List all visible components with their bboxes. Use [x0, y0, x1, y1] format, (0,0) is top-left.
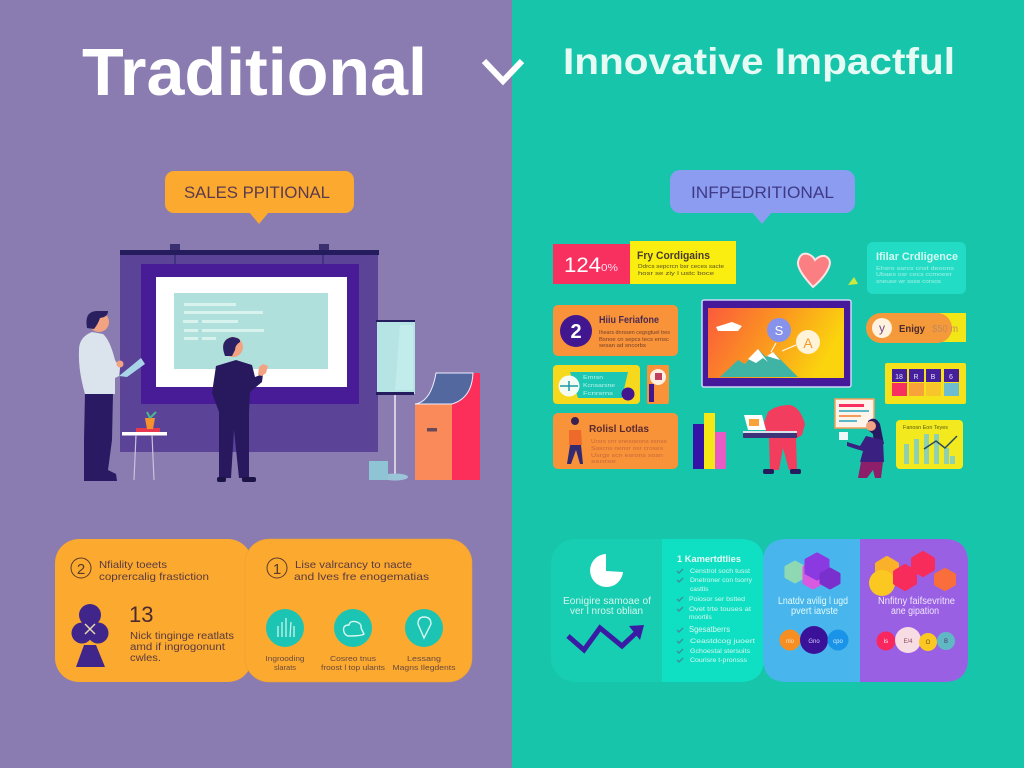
- illustration: central screen: A: [803, 335, 813, 351]
- checklist: Censtrol soch tusst: [690, 568, 750, 575]
- caption: Lnatdv avilig l ugd: [778, 596, 848, 607]
- bubbles: is: [884, 639, 888, 645]
- bubbles: Gno: [808, 639, 820, 645]
- panel: orange card 2: Ihears dnrssen cegsgtuel tres: [599, 330, 671, 336]
- panel: teal card: Ubaes osr cecs ccmoeer: [876, 272, 952, 278]
- hexagon cluster: [869, 553, 954, 596]
- checklist: [677, 554, 755, 664]
- number badge 1: [267, 558, 287, 578]
- bar chart: [693, 413, 726, 469]
- checklist: Sgesatberrs: [689, 625, 730, 634]
- panel: yellow info card: [553, 365, 640, 404]
- panel: orange card with figure: [553, 413, 678, 469]
- panel: orange card 2: 2: [570, 321, 582, 343]
- panel: bottom left second card: slarats: [274, 663, 296, 672]
- heading text: Lise valrcancy to nacte: [295, 559, 412, 571]
- bubbles: O: [926, 640, 931, 646]
- bubbles: B: [944, 639, 948, 645]
- panel: bottom left orange card: [55, 539, 252, 682]
- person at laptop: [743, 405, 805, 474]
- panel: bottom left second card: [245, 539, 472, 682]
- panel: bottom left orange card: coprercalig frastiction: [99, 571, 209, 583]
- panel: energy pill: Enigy: [899, 323, 925, 335]
- panel: orange card 2: sesan ad sncorbs: [599, 343, 647, 349]
- panel: teal card: Ifilar Crdligence: [876, 251, 958, 263]
- label: inpedritional pill: INFPEDRITIONAL: [691, 183, 834, 202]
- panel: stat card 124%: 0%: [601, 263, 618, 274]
- panel: bottom left second card: Magns Ilegdents: [392, 663, 456, 672]
- panel: energy pill: y: [879, 321, 885, 335]
- caption: Nnfitny faifsevritne: [878, 596, 955, 607]
- caption 2: Cosreo tnus: [330, 654, 376, 663]
- caption 3: Lessang: [407, 654, 441, 663]
- hexagon cluster: [786, 554, 839, 588]
- panel: bottom left second card: and lves fre enogematias: [294, 571, 429, 583]
- panel: energy pill: $50 m: [932, 324, 958, 335]
- panel: teal card: sneuse wr ssse corsos: [876, 279, 942, 285]
- panel: orange card 2: Bsnoe cn sepcs tecs ernsc: [599, 337, 670, 343]
- icon: chevron: [484, 61, 522, 81]
- checklist: Dnetroner con tsorry: [690, 577, 753, 584]
- icon: person with cross: [72, 604, 108, 667]
- icon: pointer triangle: [848, 277, 858, 285]
- panel: stat card 124%: 124: [564, 254, 601, 277]
- panel: orange card 2: [553, 305, 678, 356]
- panel: yellow grid card: 6: [949, 374, 953, 381]
- projection backdrop: [120, 244, 379, 452]
- checklist: Poiosor ser bstted: [689, 596, 745, 603]
- panel: presentation scene: [79, 244, 480, 482]
- panel: purple card: ane gipation: [891, 606, 939, 617]
- person with clipboard: [79, 311, 145, 481]
- panel: stat card 124%: [553, 241, 736, 284]
- panel: stat card 124%: hosr se ziy l ustc boce: [638, 271, 714, 277]
- panel: yellow info card: Ernrsn: [583, 375, 603, 381]
- panel: blue card: [763, 539, 860, 682]
- number badge 2: 2: [77, 561, 85, 578]
- number badge 2: [71, 558, 91, 578]
- panel: orange card with figure: ssorse: [591, 459, 616, 465]
- label: sales pill: SALES PPITIONAL: [184, 183, 330, 202]
- flip chart: [369, 320, 415, 480]
- panel: stat card 124%: Ddrcs sepcrcn bsr ceces sacte: [638, 264, 724, 270]
- checklist: casttis: [690, 586, 709, 593]
- label: inpedritional pill: [670, 170, 855, 224]
- panel: line and bar chart card: Fanosn Eon Teyes: [903, 425, 949, 431]
- illustration: central screen: [702, 300, 851, 387]
- right background: [512, 0, 1024, 768]
- panel: orange card with figure: Sascns oensr osr croses: [591, 446, 664, 452]
- checklist: Gchoestal stersuits: [690, 648, 751, 655]
- panel: yellow grid card: R: [913, 374, 919, 381]
- panel: orange card with figure: Rolisl Lotlas: [589, 423, 649, 435]
- panel: teal card: [867, 242, 966, 294]
- panel: purple card: [860, 539, 968, 682]
- panel: yellow info card: Kcnsarsne: [583, 383, 615, 389]
- left background: [0, 0, 512, 768]
- title: Innovative Impactful: Innovative Impactful: [563, 41, 955, 82]
- icon: bulb: [405, 609, 443, 647]
- checklist: Ovet trte touses at: [689, 606, 751, 613]
- panel: yellow grid card: [885, 363, 966, 404]
- heading text: Nfiality toeets: [99, 559, 167, 571]
- panel: line and bar chart card: [896, 420, 963, 469]
- title: Traditional: Traditional: [82, 35, 427, 110]
- panel: bottom right teal card: [551, 539, 764, 682]
- icon: cloud: [334, 609, 372, 647]
- panel: bottom left second card: froost l top ulants: [321, 663, 385, 672]
- panel: orange card 2: Hiiu Feriafone: [599, 315, 659, 326]
- stat 13: 13: [129, 602, 153, 627]
- bubbles: [780, 626, 848, 654]
- panel: yellow info card: Fcnrsrns: [583, 391, 614, 397]
- icon: hand: [266, 609, 304, 647]
- label: sales pill: [165, 171, 354, 224]
- caption: Eonigire samoae of: [563, 596, 651, 607]
- caption 1: Ingrooding: [266, 654, 304, 663]
- side table with plant: [122, 412, 167, 480]
- checklist: 1 Kamertdtlies: [677, 554, 741, 565]
- panel: energy pill: [866, 313, 966, 343]
- panel: bottom left orange card: amd if ingrogonunt: [130, 642, 225, 653]
- checklist: Courisre t-pronsss: [690, 657, 748, 664]
- person with chart board: [835, 399, 884, 478]
- panel: blue card: pvert iavste: [791, 606, 838, 617]
- bubbles: [876, 627, 955, 653]
- icon: zigzag arrow: [568, 625, 644, 650]
- panel: yellow grid card: B: [931, 374, 936, 381]
- panel: bottom left orange card: cwles.: [130, 653, 161, 664]
- panel: orange card with figure: Usrgs scn esrons sosn: [591, 453, 663, 459]
- number badge 1: 1: [273, 561, 281, 578]
- stat description: Nick tinginge reatlats: [130, 631, 234, 642]
- panel: yellow grid card: 18: [895, 374, 903, 381]
- checklist: Ceastdcog juoert: [690, 638, 755, 645]
- icon: heart: [798, 254, 830, 287]
- person at screen: [212, 337, 268, 482]
- panel: small orange tag: [647, 365, 669, 404]
- icon: pie: [590, 554, 623, 587]
- bubbles: cpo: [833, 639, 843, 645]
- bubbles: E/4: [903, 639, 913, 645]
- panel: teal card: Ehsro sarcs cnst deoons: [876, 266, 955, 272]
- panel: stat card 124%: Fry Cordigains: [637, 250, 710, 262]
- checklist: moortils: [689, 614, 713, 621]
- panel: orange card with figure: Ursrs cnr snesoeons ssnse: [591, 439, 667, 445]
- bubbles: nlo: [786, 639, 795, 645]
- orange cabinet: [415, 373, 480, 480]
- illustration: central screen: S: [775, 323, 784, 338]
- panel: bottom right teal card: ver l nrost oblian: [570, 606, 643, 617]
